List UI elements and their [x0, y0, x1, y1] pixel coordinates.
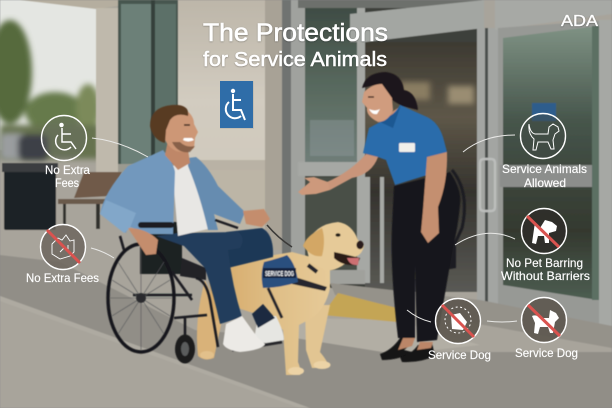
- far shoe: [254, 316, 284, 343]
- prohibition slash: [527, 216, 559, 247]
- connector: [91, 248, 114, 258]
- title line two: for Service Animals: [203, 49, 387, 71]
- prohibition slash: [47, 230, 80, 263]
- icon: white small dog: [532, 310, 559, 334]
- callout: service animals allowed: Allowed: [524, 177, 566, 190]
- hair and beard: [150, 105, 188, 143]
- entrance doors left section: [282, 0, 484, 292]
- door handle: [480, 159, 495, 211]
- label: Service Dog: [428, 349, 491, 362]
- denim shirt left: [100, 150, 175, 234]
- callout: no pet barring: [455, 208, 590, 283]
- hands: [128, 228, 158, 255]
- near jeans: [156, 232, 243, 324]
- callout: service dog, right: [487, 298, 578, 360]
- dog: golden labrador with service vest: SERVICE DOG: [265, 271, 294, 278]
- callout: no extra fees, wheelchair: [42, 116, 148, 190]
- prohibition slash: [528, 305, 560, 336]
- icon: dog outline: [529, 124, 559, 150]
- callout: service animals allowed: [463, 114, 587, 190]
- shoes: [380, 338, 415, 360]
- leash: [267, 225, 292, 247]
- trousers: [392, 172, 460, 342]
- callout: no pet barring: Without Barriers: [501, 270, 590, 283]
- label: Service Dog: [515, 347, 578, 360]
- right arm: [421, 152, 447, 243]
- connector: [463, 135, 515, 152]
- background: parked car: [0, 133, 48, 160]
- wheelchair back and seat: [140, 222, 182, 274]
- canopy: [0, 0, 180, 9]
- callout: service dog, left: [407, 298, 491, 362]
- polo shirt: [363, 105, 447, 185]
- callout: no extra fees, crossed out: [26, 224, 114, 285]
- label: Service Animals: [502, 163, 587, 176]
- neck: [382, 108, 403, 128]
- eye: [184, 124, 190, 126]
- dog rear leg: [197, 280, 222, 360]
- tee: [172, 162, 212, 236]
- trash bin: [2, 163, 58, 230]
- smile: [183, 138, 194, 142]
- connector: [92, 138, 148, 157]
- dog ear: [303, 228, 324, 256]
- dog far front leg: [305, 305, 330, 368]
- left arm reaching out: [327, 154, 378, 190]
- connector: [407, 310, 431, 322]
- icon: wheelchair: [56, 124, 76, 150]
- near shoe: [223, 316, 265, 352]
- right glass door: [477, 0, 612, 326]
- caster wheel: [175, 334, 195, 364]
- head: [362, 84, 393, 122]
- dog head: [306, 222, 364, 271]
- person: man in wheelchair: [100, 105, 284, 363]
- vest: [262, 255, 298, 288]
- ADA label: ADA: [561, 13, 598, 30]
- wall with sign: [178, 0, 268, 250]
- bare ankles: [398, 338, 415, 350]
- name badge: [399, 143, 415, 152]
- pavement: [0, 232, 612, 408]
- vest label: [263, 268, 296, 278]
- icon: barking dog: [451, 313, 467, 330]
- dog body: [208, 252, 330, 375]
- hand: [298, 177, 330, 195]
- footrest: [232, 342, 282, 350]
- connector: [455, 233, 515, 245]
- dog paws: [288, 367, 304, 375]
- wheelchair frame: [120, 236, 218, 347]
- vest straps and collar: [292, 277, 327, 291]
- icon: blue accessibility sign: [220, 81, 254, 129]
- armrests: [138, 222, 174, 228]
- dog: golden labrador with service vest: [197, 222, 364, 375]
- eye: [368, 96, 374, 98]
- connector: [487, 321, 517, 322]
- smile: [369, 109, 380, 114]
- neck and head: [165, 140, 190, 170]
- bag and strap: [450, 170, 464, 254]
- callout: no extra fees, wheelchair: Fees: [55, 177, 79, 190]
- label: No Extra Fees: [26, 272, 99, 285]
- title line one: The Protections: [203, 19, 388, 47]
- title: [203, 19, 388, 71]
- hair: [362, 72, 418, 110]
- icon: white dog: [532, 220, 557, 244]
- pillar: [96, 8, 119, 173]
- person: woman in blue polo: [298, 72, 464, 362]
- window: left storefront: [118, 0, 178, 172]
- label: No Pet Barring: [506, 257, 583, 270]
- main wheel: [108, 244, 174, 352]
- icon: crumpled paper outline: [52, 235, 74, 259]
- far leg: [226, 228, 273, 268]
- background: sky and trees: [0, 0, 100, 159]
- bench: [58, 172, 122, 229]
- dog mouth and tongue: [334, 252, 360, 265]
- denim shirt right: [188, 157, 245, 230]
- label: No Extra: [45, 164, 91, 177]
- prohibition slash: [442, 305, 474, 337]
